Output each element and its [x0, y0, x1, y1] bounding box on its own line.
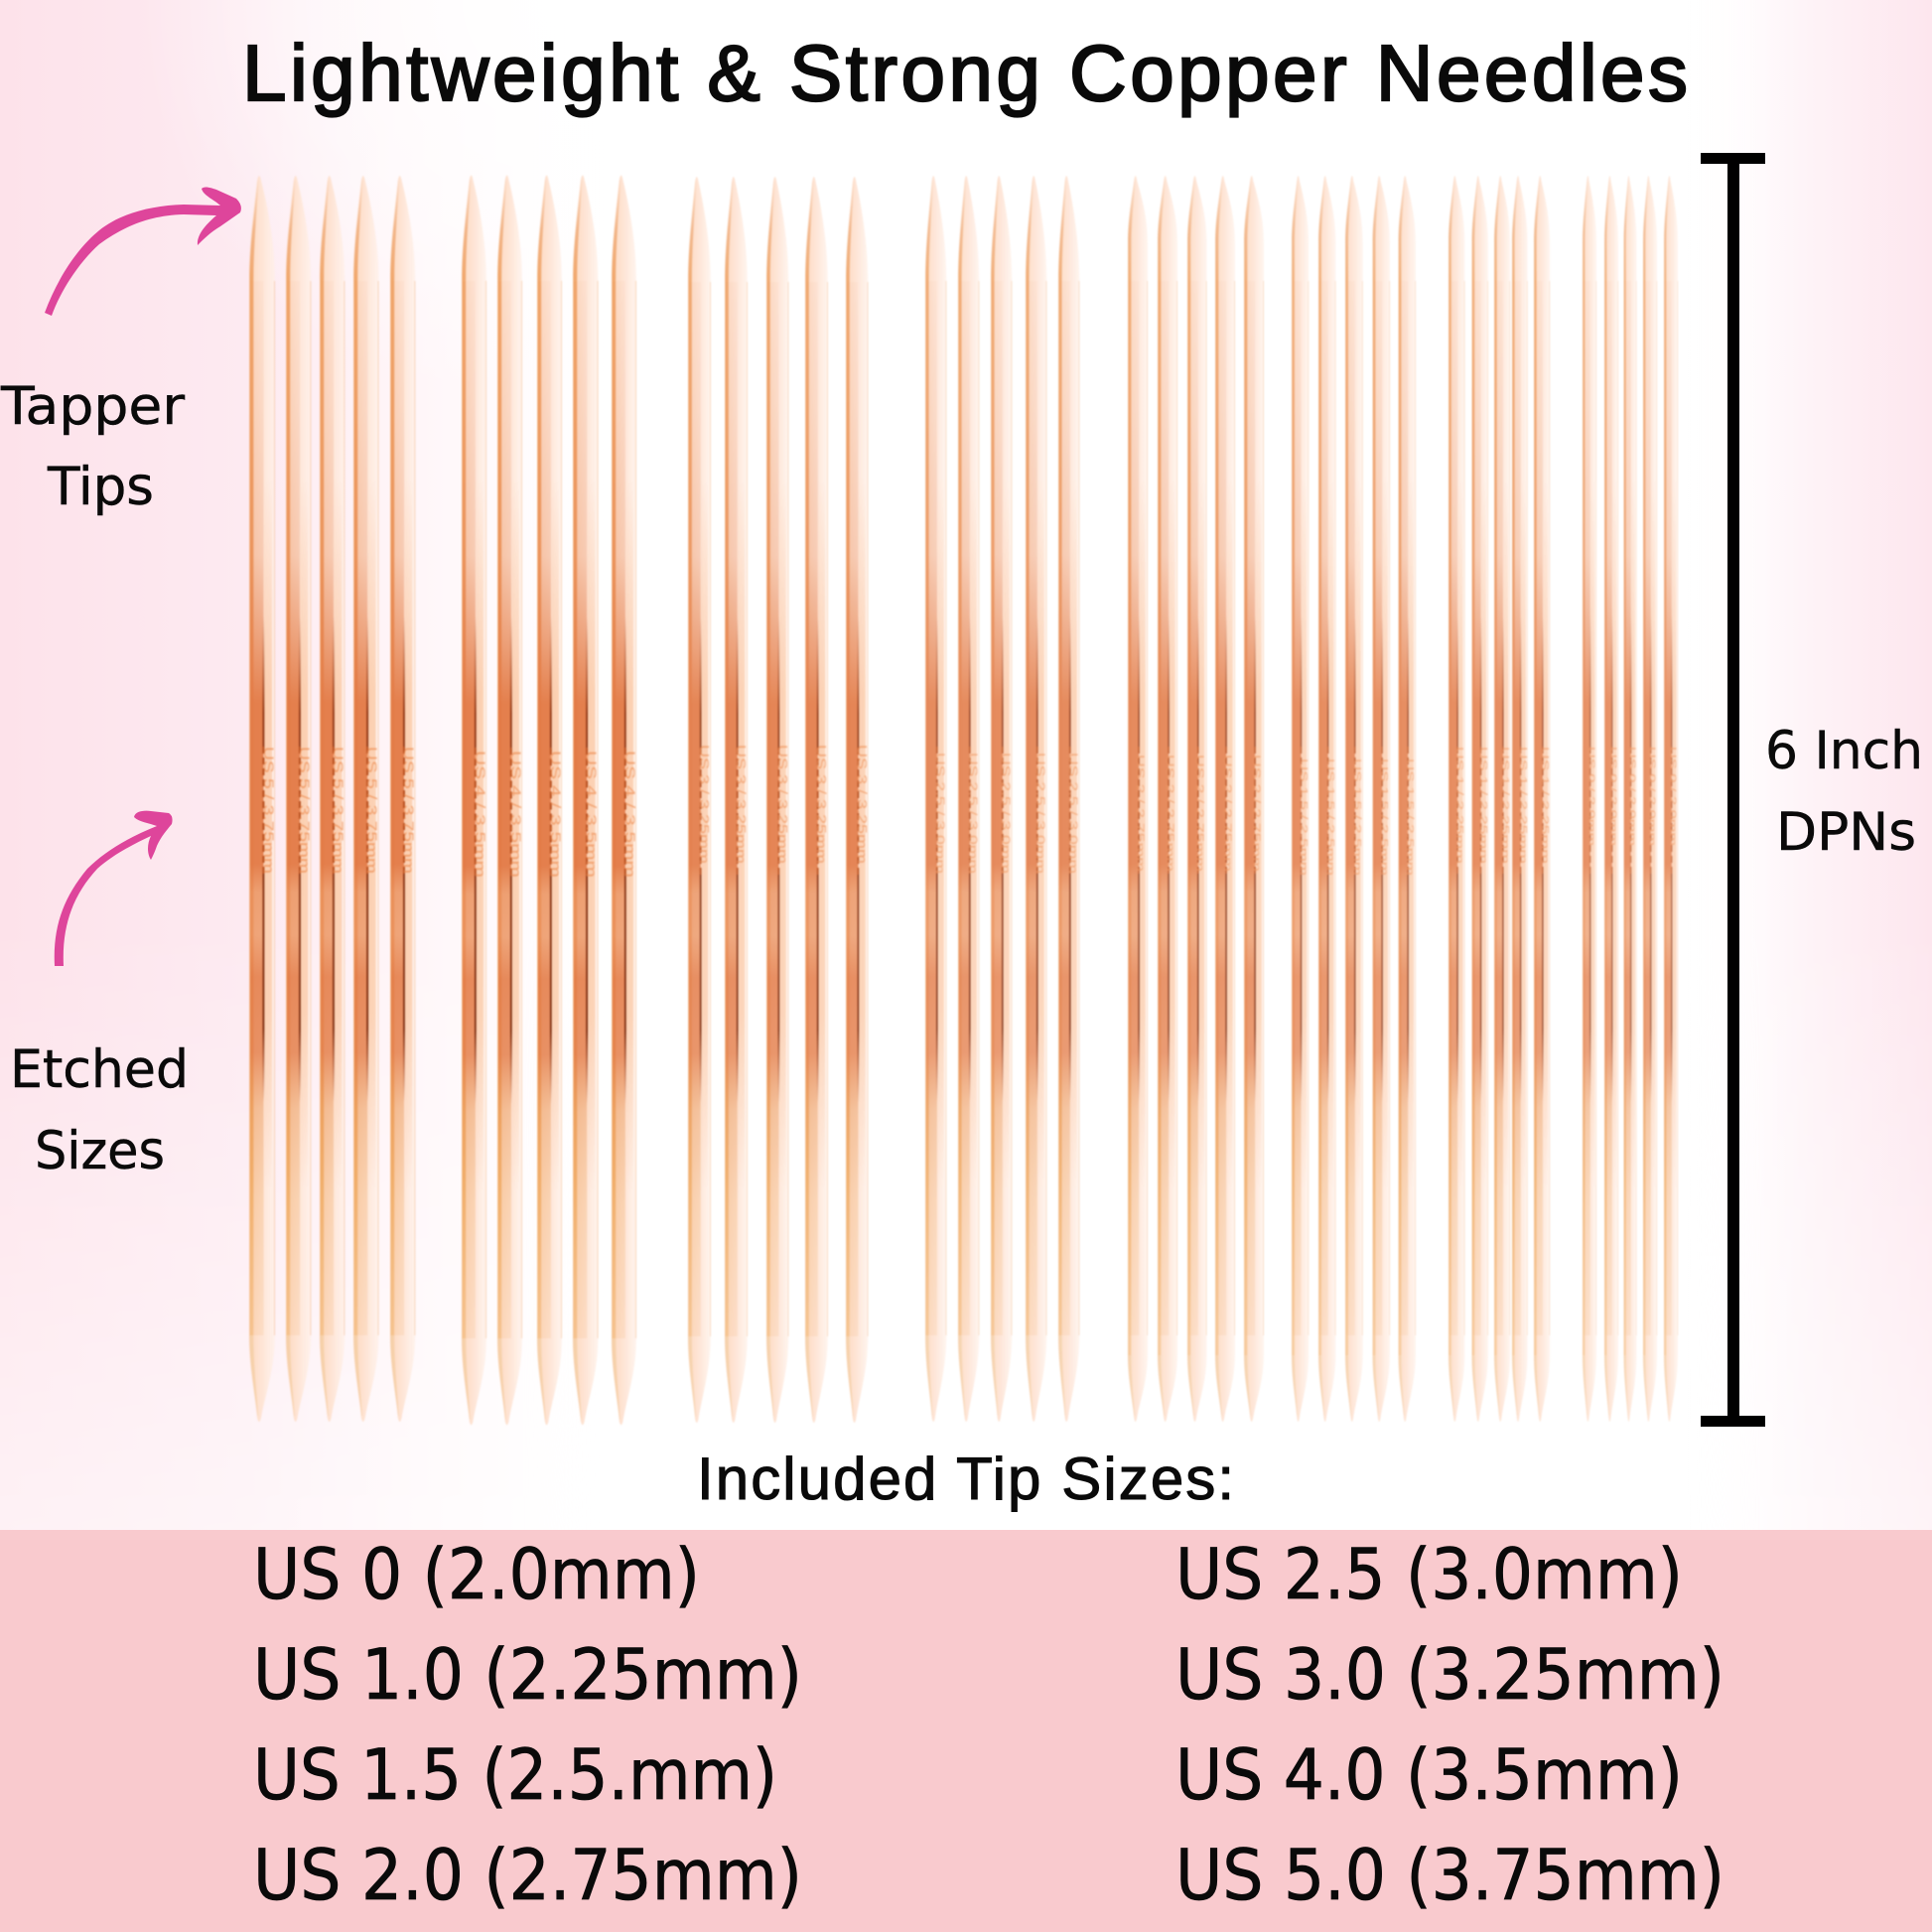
needle set: US 1: US 1 / 2.25mm	[1539, 747, 1550, 864]
needle set: US 1.5: US 1.5 / 2.5mm	[1351, 759, 1362, 876]
needle set: US 2.5: US 2.5 / 3.0mm	[999, 753, 1013, 874]
sizes: left column: US 1.5 (2.5.mm)	[253, 1734, 777, 1816]
needle set: US 2: US 2 / 2.75mm	[1250, 755, 1262, 872]
background	[0, 0, 1932, 1530]
needle set: US 4	[462, 176, 638, 1425]
sizes: left column: US 0 (2.0mm)	[253, 1534, 700, 1615]
needle set: US 3: US 3 / 3.25mm	[855, 745, 870, 864]
needle set: US 5: US 5 / 3.75mm	[297, 747, 313, 874]
label: 6 Inch DPNs	[1765, 721, 1923, 863]
needle set: US 5: US 5 / 3.75mm	[401, 747, 417, 874]
needle set: US 2: US 2 / 2.75mm	[1221, 755, 1233, 872]
label: Tapper Tips: Tapper	[0, 376, 185, 437]
label: Etched Sizes: Etched	[10, 1039, 189, 1100]
needle set: US 1.5: US 1.5 / 2.5mm	[1298, 759, 1309, 876]
needle set: US 5	[249, 176, 417, 1422]
heading: included tip sizes: Included Tip Sizes:	[697, 1446, 1234, 1512]
needle set: US 1.5	[1292, 176, 1416, 1422]
sizes: left column: US 2.0 (2.75mm)	[253, 1835, 802, 1916]
needle set: US 1: US 1 / 2.25mm	[1517, 747, 1528, 864]
sizes: right column: US 4.0 (3.5mm)	[1175, 1734, 1683, 1816]
needle set: US 0: US 0 / 2.0mm	[1608, 747, 1618, 846]
dimension bar: 6 inch	[1701, 153, 1765, 1427]
needle set: US 2.5: US 2.5 / 3.0mm	[1034, 753, 1047, 874]
needle set: US 1	[1449, 176, 1550, 1422]
needle set: US 3: US 3 / 3.25mm	[734, 745, 749, 864]
needle set: US 2: US 2 / 2.75mm	[1164, 755, 1175, 872]
sizes: right column	[1175, 1534, 1725, 1916]
needle set: US 2.5	[925, 176, 1080, 1422]
label: Tapper Tips	[0, 376, 185, 517]
arrow: to tapered tips	[45, 187, 241, 316]
needle set: US 1.5: US 1.5 / 2.5mm	[1324, 759, 1335, 876]
needle set: US 1.5: US 1.5 / 2.5mm	[1404, 759, 1415, 876]
title: Lightweight & Strong Copper Needles	[242, 29, 1688, 117]
needle set: US 0: US 0 / 2.0mm	[1668, 747, 1678, 846]
needle set: US 2	[1128, 176, 1264, 1422]
needle set: US 5: US 5 / 3.75mm	[331, 747, 346, 874]
needle set: US 2.5: US 2.5 / 3.0mm	[933, 753, 947, 874]
label: Etched Sizes: Sizes	[35, 1121, 165, 1181]
needle set: US 1.5: US 1.5 / 2.5mm	[1378, 759, 1389, 876]
sizes: right column: US 5.0 (3.75mm)	[1175, 1835, 1725, 1916]
needle set: US 3: US 3 / 3.25mm	[697, 745, 712, 864]
needle set: US 0: US 0 / 2.0mm	[1647, 747, 1657, 846]
needle set: US 0: US 0 / 2.0mm	[1587, 747, 1596, 846]
needle set: US 4: US 4 / 3.5mm	[508, 751, 524, 878]
sizes: right column: US 3.0 (3.25mm)	[1175, 1634, 1725, 1716]
needle set: US 2.5: US 2.5 / 3.0mm	[1066, 753, 1080, 874]
label: Etched Sizes	[10, 1039, 189, 1181]
needle set: US 5: US 5 / 3.75mm	[364, 747, 380, 874]
needle set: US 4: US 4 / 3.5mm	[548, 751, 564, 878]
needle set: US 4: US 4 / 3.5mm	[584, 751, 600, 878]
needle set: US 4: US 4 / 3.5mm	[473, 751, 488, 878]
needle set: US 3: US 3 / 3.25mm	[775, 745, 790, 864]
needle set: US 4: US 4 / 3.5mm	[622, 751, 638, 878]
label: 6 Inch DPNs: DPNs	[1776, 802, 1916, 863]
sizes: left column	[253, 1534, 802, 1916]
needle set: US 2: US 2 / 2.75mm	[1134, 755, 1146, 872]
panel: size list	[0, 1530, 1932, 1932]
needle set: US 1: US 1 / 2.25mm	[1499, 747, 1510, 864]
needle set: US 2: US 2 / 2.75mm	[1193, 755, 1205, 872]
arrow: to etched sizes	[55, 811, 173, 966]
needle set: US 1: US 1 / 2.25mm	[1477, 747, 1488, 864]
needle sets	[249, 176, 1678, 1425]
sizes: right column: US 2.5 (3.0mm)	[1175, 1534, 1683, 1615]
label: 6 Inch DPNs: 6 Inch	[1765, 721, 1923, 781]
needle set: US 5: US 5 / 3.75mm	[261, 747, 277, 874]
needle set: US 2.5: US 2.5 / 3.0mm	[966, 753, 980, 874]
needle set: US 0	[1583, 176, 1678, 1422]
needle set: US 1: US 1 / 2.25mm	[1453, 747, 1464, 864]
needle set: US 0: US 0 / 2.0mm	[1627, 747, 1637, 846]
label: Tapper Tips: Tips	[47, 457, 154, 517]
needle set: US 3	[688, 177, 870, 1423]
sizes: left column: US 1.0 (2.25mm)	[253, 1634, 802, 1716]
needle set: US 3: US 3 / 3.25mm	[814, 745, 829, 864]
